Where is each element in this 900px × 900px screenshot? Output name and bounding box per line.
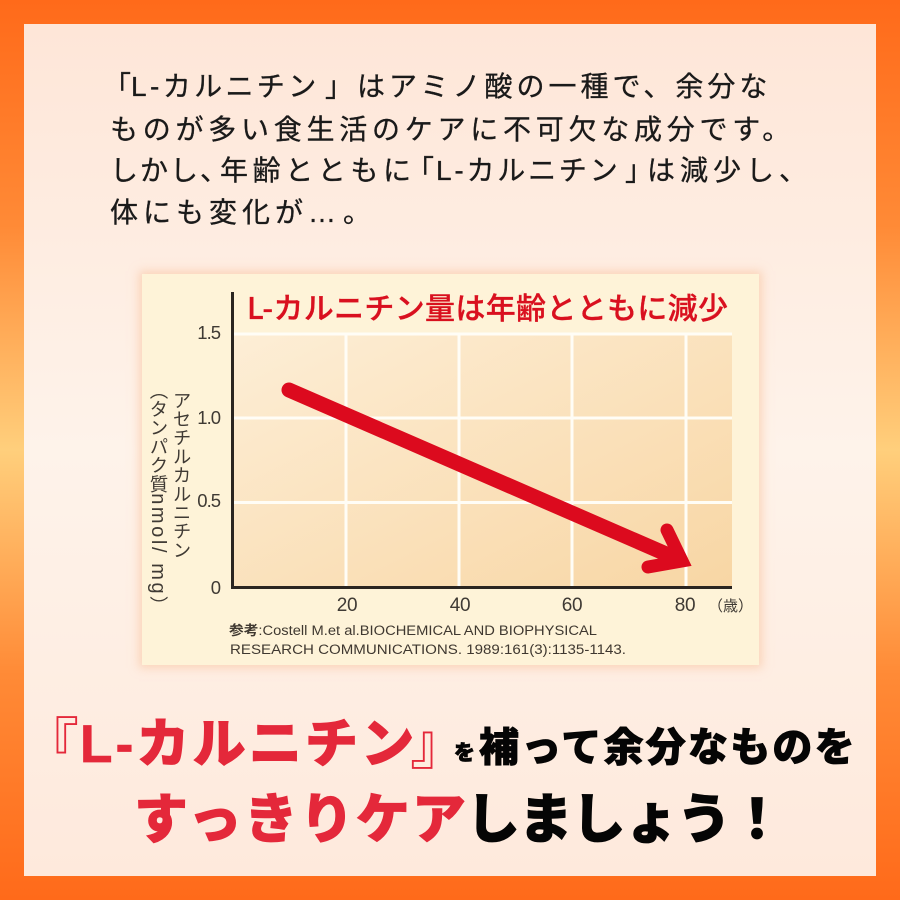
intro text: 「 — [103, 71, 135, 102]
closing message line 1: L-カルニチン — [80, 715, 417, 774]
x axis unit: （歳） — [708, 595, 753, 616]
chart title: L-カルニチン量は年齢とともに減少 — [247, 284, 728, 328]
y axis ticks: 1.5 — [197, 322, 221, 343]
chart panel — [142, 274, 759, 665]
intro text: ものが多い食生活のケアに不可欠な成分です。 — [110, 114, 795, 145]
intro text: L-カルニチン — [436, 155, 620, 186]
intro text: 。 — [343, 197, 375, 228]
y axis ticks: 0.5 — [197, 490, 221, 511]
intro text: 」 — [325, 71, 357, 102]
intro text: 年齢とともに — [220, 155, 416, 186]
y axis ticks — [197, 322, 221, 598]
source note — [229, 622, 626, 657]
y axis label: （タンパク質 nmol/ mg ） — [147, 381, 169, 615]
closing message line 2: すっきりケア — [134, 790, 468, 850]
y axis label: アセチルカルニチン — [171, 391, 192, 559]
downward arrow — [289, 390, 691, 569]
closing message line 1 — [23, 713, 857, 776]
intro text: はアミノ酸の一種で、余分な — [357, 71, 771, 102]
closing message line 2 — [134, 790, 783, 850]
y axis ticks: 0 — [211, 577, 221, 598]
y axis label — [147, 381, 192, 615]
closing message line 1: 『 — [23, 713, 79, 776]
intro text: は減少し、 — [647, 155, 812, 186]
x axis ticks — [337, 595, 695, 616]
intro text: L-カルニチン — [131, 71, 320, 102]
source note: RESEARCH COMMUNICATIONS. 1989:161(3):1135-1143. — [230, 642, 626, 657]
closing message line 1: 補って余分なものを — [479, 726, 857, 770]
intro text: … — [308, 197, 336, 228]
chart axes — [232, 292, 732, 588]
intro text: 「 — [406, 155, 438, 186]
source note: 参考:Costell M.et al.BIOCHEMICAL AND BIOPHYSICAL — [229, 622, 598, 638]
closing message line 1: 』 — [410, 713, 466, 776]
x axis ticks: 60 — [562, 595, 582, 616]
closing message line 2: しましょう！ — [466, 790, 783, 850]
x axis ticks: 40 — [450, 595, 470, 616]
closing message line 1: を — [454, 742, 475, 765]
intro text: しかし、 — [110, 155, 230, 186]
intro text — [103, 71, 812, 228]
plot area — [234, 334, 732, 587]
intro text: 体にも変化が — [110, 197, 308, 228]
x axis ticks: 20 — [337, 595, 357, 616]
y axis ticks: 1.0 — [197, 407, 221, 428]
x axis ticks: 80 — [675, 595, 695, 616]
intro text: 」 — [625, 155, 657, 186]
